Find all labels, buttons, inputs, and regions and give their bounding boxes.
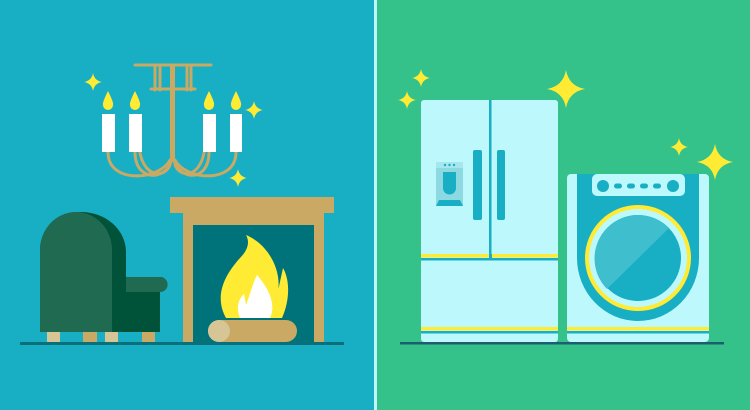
candle flames xyxy=(103,91,241,110)
fire xyxy=(221,235,288,318)
candles xyxy=(102,114,242,152)
panel: appliances xyxy=(377,0,750,410)
log xyxy=(208,320,297,342)
sparkles left xyxy=(84,73,263,187)
panel: living room xyxy=(0,0,374,410)
sparkles right xyxy=(398,69,733,180)
fireplace xyxy=(170,197,334,342)
armchair xyxy=(40,212,168,342)
chandelier xyxy=(108,65,236,176)
fridge xyxy=(421,100,558,342)
washer xyxy=(567,174,709,342)
divider xyxy=(374,0,377,410)
dispenser xyxy=(436,162,463,206)
